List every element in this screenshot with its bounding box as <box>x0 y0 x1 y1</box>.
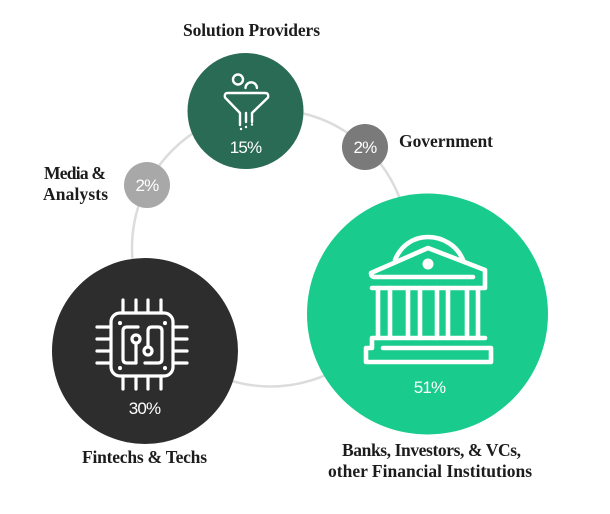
value: 30%: 30% <box>129 399 161 418</box>
value: 2% media: 2% <box>136 176 159 195</box>
circle: government <box>342 124 388 170</box>
panel: media and analysts <box>43 162 170 208</box>
icon: funnel <box>225 74 268 129</box>
heading: media and analysts: Analysts <box>43 184 108 204</box>
heading: banks and financial institutions: other Financial Institutions <box>328 461 532 481</box>
value: 51%: 51% <box>414 378 446 397</box>
heading: government: Government <box>399 131 493 151</box>
circle: banks <box>307 194 548 434</box>
circle: media and analysts <box>124 162 170 208</box>
panel: government <box>342 124 493 170</box>
heading: solution providers: Solution Providers <box>183 20 320 40</box>
connecting ring <box>132 110 409 386</box>
value: 15%: 15% <box>230 138 262 157</box>
panel: banks and financial institutions <box>307 194 548 481</box>
circle: fintechs <box>52 258 238 444</box>
value: 2% government: 2% <box>354 138 377 157</box>
heading: fintechs and techs: Fintechs & Techs <box>82 447 207 467</box>
heading: media and analysts: Media & <box>44 163 106 183</box>
panel: solution providers <box>183 20 320 169</box>
heading: banks and financial institutions: Banks, Investors, & VCs, <box>342 440 521 460</box>
icon: bank building <box>366 237 491 362</box>
panel: fintechs and techs <box>52 258 238 467</box>
icon: microchip <box>97 300 187 389</box>
circle: solution providers <box>188 53 304 169</box>
